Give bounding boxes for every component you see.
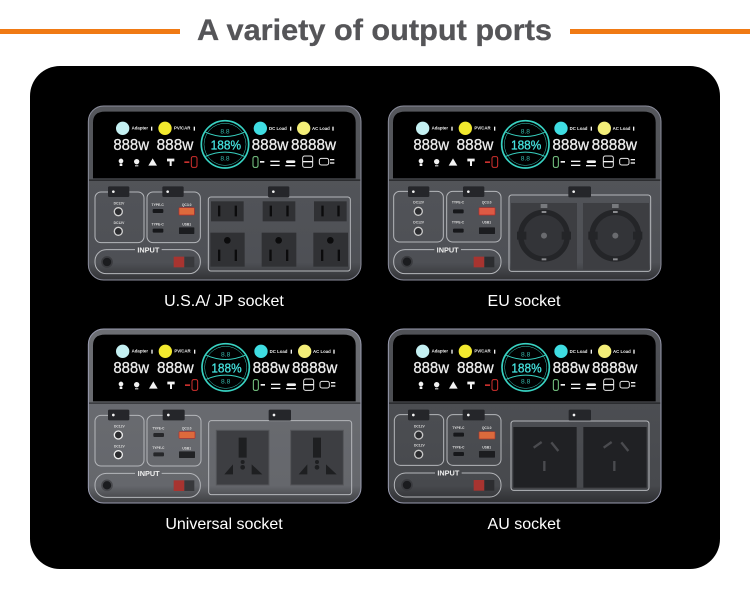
title: A variety of output ports (197, 14, 552, 47)
DC and USB ports: DC12V (114, 425, 125, 429)
display readouts: Adapter (132, 126, 148, 131)
input panel (95, 245, 200, 274)
DC and USB ports: TYPE-C (452, 221, 465, 225)
DC and USB ports: QC3.0 (182, 427, 192, 431)
left title rule (0, 29, 180, 34)
display readouts: 188% (511, 361, 542, 376)
DC and USB ports: TYPE-C (152, 446, 165, 450)
right title rule (570, 29, 750, 34)
display readouts: Adapter (432, 349, 448, 354)
device: Universal socket (88, 329, 361, 503)
DC and USB ports: DC12V (413, 201, 425, 205)
caption: U.S.A / JP: U.S.A/ JP socket (164, 293, 284, 310)
DC and USB ports: TYPE-C (452, 426, 465, 430)
display readouts: 188% (211, 361, 242, 376)
input panel: INPUT (437, 468, 460, 477)
display readouts: DC Load (269, 126, 287, 131)
display readouts: 888w (157, 137, 194, 154)
display readouts: PV/CAR (474, 126, 492, 131)
DC and USB ports: TYPE-C (152, 223, 164, 227)
DC and USB ports: TYPE-C (152, 203, 164, 207)
display readouts: PV/CAR (474, 349, 492, 354)
display readouts: 8.8 (521, 351, 531, 358)
display readouts: 8.8 (221, 379, 231, 386)
caption: AU: AU socket (488, 516, 561, 533)
display readouts (113, 344, 338, 391)
display readouts: 8.8 (220, 156, 230, 163)
display readouts: Adapter (132, 349, 148, 354)
DC and USB ports: DC12V (114, 221, 125, 225)
display readouts: 8.8 (221, 351, 231, 358)
display readouts: PV/CAR (174, 126, 191, 131)
display readouts: 8.8 (521, 156, 530, 163)
display readouts: PV/CAR (174, 349, 192, 354)
display readouts: 888w (552, 137, 590, 154)
DC and USB ports (95, 186, 200, 243)
DC and USB ports: DC12V (413, 220, 425, 224)
display readouts: DC Load (270, 349, 288, 354)
DC and USB ports (394, 186, 501, 242)
input panel (394, 245, 501, 274)
caption: EU: EU socket (488, 293, 561, 310)
display readouts: DC Load (570, 126, 588, 131)
display readouts (413, 121, 638, 168)
display readouts: 8888w (592, 360, 638, 377)
display readouts: 888w (157, 360, 194, 377)
DC and USB ports: QC3.0 (482, 426, 492, 430)
DC and USB ports: DC12V (114, 444, 125, 448)
display readouts: 188% (211, 138, 241, 153)
DC and USB ports: DC12V (414, 425, 425, 429)
AC sockets: EU (509, 186, 651, 271)
display readouts: 888w (113, 360, 150, 377)
display readouts: 888w (252, 137, 289, 154)
DC and USB ports: DC12V (414, 444, 425, 448)
display readouts: 888w (457, 137, 494, 154)
display readouts: AC Load (613, 349, 631, 354)
display readouts: DC Load (570, 349, 588, 354)
display readouts: 888w (457, 360, 494, 377)
display readouts: 8888w (292, 360, 338, 377)
input panel: INPUT (137, 245, 160, 254)
caption: Universal: Universal socket (165, 516, 283, 533)
DC and USB ports: TYPE-C (152, 427, 165, 431)
display readouts: AC Load (613, 126, 631, 131)
display readouts: 888w (253, 360, 290, 377)
AC sockets: universal (209, 410, 352, 495)
DC and USB ports: QC3.0 (482, 201, 492, 205)
display readouts: 188% (511, 138, 541, 153)
input panel: INPUT (437, 245, 459, 254)
DC and USB ports: USB1 (182, 447, 191, 451)
DC and USB ports: TYPE-C (452, 445, 465, 449)
display readouts: 8.8 (521, 128, 530, 135)
display readouts: 8888w (592, 137, 638, 154)
DC and USB ports: USB1 (482, 221, 491, 225)
display readouts: 8.8 (521, 379, 531, 386)
display readouts: 888w (553, 360, 590, 377)
DC and USB ports: TYPE-C (452, 201, 465, 205)
display readouts: 8888w (291, 137, 337, 154)
display readouts: Adapter (432, 126, 448, 131)
display readouts (113, 121, 337, 168)
display readouts (413, 344, 638, 391)
black panel (30, 66, 720, 569)
AC sockets: US and JP (208, 186, 350, 271)
display readouts: AC Load (312, 126, 330, 131)
input panel (95, 469, 200, 497)
device: EU socket (388, 106, 661, 280)
DC and USB ports (95, 410, 201, 466)
DC and USB ports: USB1 (182, 223, 191, 227)
input panel: INPUT (138, 469, 160, 478)
display readouts: AC Load (313, 349, 331, 354)
display readouts: 8.8 (220, 128, 230, 135)
device: AU socket (388, 329, 661, 503)
input panel (394, 468, 501, 497)
display readouts: 888w (413, 360, 450, 377)
display readouts: 888w (413, 137, 450, 154)
DC and USB ports: QC3.0 (182, 203, 192, 207)
device: U.S.A / JP socket (88, 106, 361, 280)
AC sockets: AU (511, 410, 649, 490)
DC and USB ports: USB1 (482, 445, 491, 449)
DC and USB ports: DC12V (114, 201, 125, 205)
display readouts: 888w (113, 137, 150, 154)
DC and USB ports (394, 410, 501, 465)
